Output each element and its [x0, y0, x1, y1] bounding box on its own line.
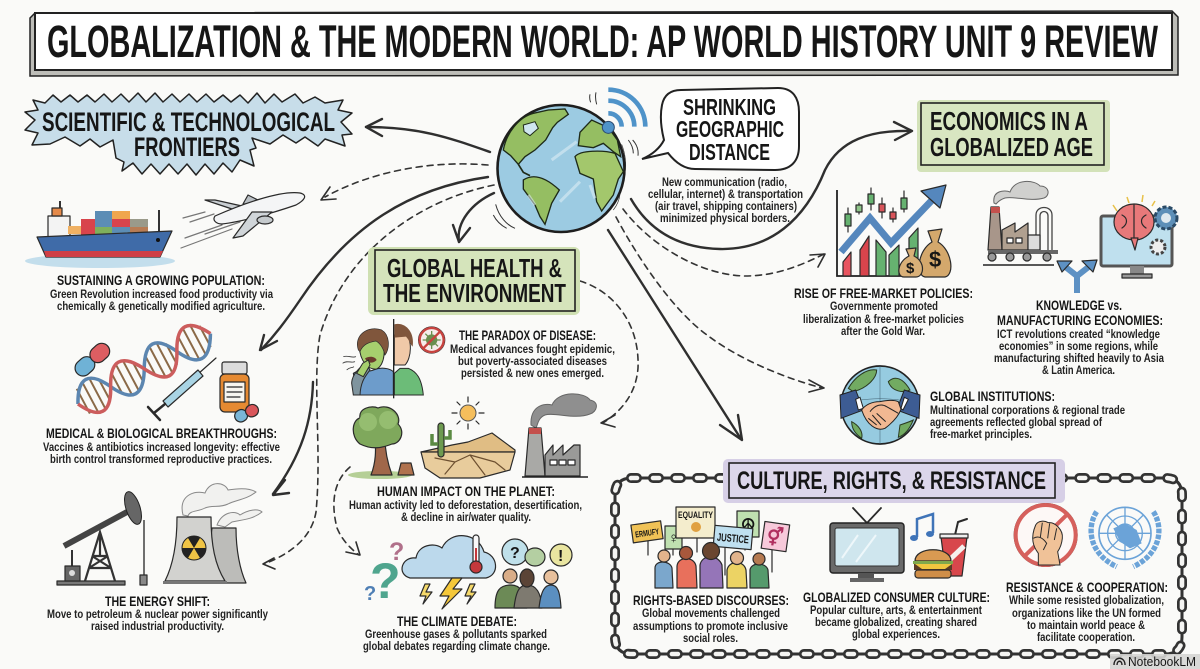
- heading: scientific and technological frontiers: FRONTIERS: [134, 132, 240, 162]
- arrow: globe to scientific frontiers: [366, 119, 490, 152]
- icon: money bags: $: [906, 260, 915, 277]
- icon: sick and healthy people: [343, 319, 445, 398]
- text: the paradox of disease: but poverty-associated diseases: [458, 354, 607, 368]
- speech bubble: shrinking geographic distance: [642, 88, 799, 170]
- icon: protesters with signs: ⚥: [766, 525, 785, 548]
- text: knowledge vs manufacturing economies: ICT revolutions created “knowledge: [997, 327, 1160, 341]
- text: knowledge vs manufacturing economies: KNOWLEDGE vs.: [1036, 297, 1122, 313]
- text: the climate debate: global debates regarding climate change.: [363, 639, 550, 653]
- text: globalized consumer culture: became globalized, creating shared: [815, 615, 977, 629]
- text: rise of free-market policies: after the Gold War.: [841, 324, 925, 338]
- text: shrinking distance description: New communication (radio,: [662, 175, 787, 189]
- chart: market candlesticks and rising arrow: [837, 185, 946, 276]
- text: resistance and cooperation: While some resisted globalization,: [1009, 593, 1164, 607]
- icon: music note: [910, 514, 934, 541]
- icon: computer brain and gears: [1101, 195, 1177, 278]
- icon: blue fork arrow: [1057, 260, 1097, 293]
- text: global institutions: free-market principles.: [930, 427, 1032, 441]
- badge: NotebookLM watermark: NotebookLM: [1128, 654, 1196, 669]
- text: rights-based discourses: Global movements challenged: [642, 606, 780, 620]
- text: shrinking distance description: (air travel, shipping containers): [655, 199, 797, 213]
- icon: question marks: ?: [364, 583, 376, 605]
- text: the energy shift: raised industrial productivity.: [91, 619, 224, 633]
- icon: burger: [913, 550, 953, 578]
- icon: soda cup: [940, 519, 968, 576]
- text: resistance and cooperation: to maintain world peace &: [1027, 618, 1145, 632]
- text: knowledge vs manufacturing economies: economies” in some regions, while: [999, 339, 1158, 353]
- text: global institutions: Multinational corporations & regional trade: [930, 403, 1125, 417]
- text: human impact on the planet: [349, 483, 582, 524]
- text: rights-based discourses: assumptions to promote inclusive: [633, 619, 788, 633]
- heading: culture, rights and resistance: CULTURE, RIGHTS, & RESISTANCE: [737, 467, 1046, 495]
- icon: polluting factory: [522, 394, 596, 477]
- heading: global health and the environment: [368, 247, 580, 315]
- icon: protesters with signs: ☮: [741, 517, 755, 534]
- icon: protesters with signs: ERMUFY: [635, 526, 660, 539]
- icon: desert and sun: [421, 397, 515, 478]
- text: shrinking distance description: [648, 175, 803, 225]
- icon: debating people: ?: [510, 545, 520, 562]
- arrow: globe to culture: [608, 230, 742, 440]
- speech bubble: shrinking geographic distance: SHRINKING: [683, 94, 776, 120]
- heading: global health and the environment: GLOBAL HEALTH &: [387, 253, 562, 283]
- icon: syringe: [148, 358, 216, 420]
- text: resistance and cooperation: [1006, 579, 1168, 644]
- icon: oil pumpjack: [57, 490, 147, 585]
- text: human impact on the planet: & decline in air/water quality.: [401, 510, 531, 524]
- text: medical and biological breakthroughs: Vaccines & antibiotics increased longevity: effective: [43, 440, 280, 454]
- icon: nuclear cooling towers: [163, 484, 262, 584]
- heading: culture, rights and resistance: [723, 459, 1065, 503]
- icon: protesters with signs: EQUALITY: [678, 510, 713, 520]
- icon: debating people: !: [558, 548, 563, 565]
- icon: DNA helix: [70, 318, 219, 420]
- icon: airplane: [181, 193, 305, 248]
- heading: global health and the environment: THE ENVIRONMENT: [383, 278, 566, 308]
- text: medical and biological breakthroughs: birth control transformed reproductive practices.: [50, 452, 272, 466]
- text: rise of free-market policies: RISE OF FREE-MARKET POLICIES:: [794, 285, 973, 301]
- icon: television: [830, 508, 904, 582]
- arrow: globe to global health: [453, 193, 494, 242]
- text: shrinking distance description: cellular, internet) & transportation: [648, 187, 803, 201]
- text: globalized consumer culture: [803, 589, 990, 641]
- text: knowledge vs manufacturing economies: manufacturing shifted heavily to Asia: [994, 351, 1164, 365]
- icon: protesters with signs: JUSTICE: [716, 532, 749, 546]
- text: resistance and cooperation: facilitate cooperation.: [1037, 630, 1135, 644]
- arrow: dashed globe to energy shift: [263, 185, 494, 569]
- text: global institutions: GLOBAL INSTITUTIONS:: [930, 388, 1055, 404]
- heading: scientific and technological frontiers: SCIENTIFIC & TECHNOLOGICAL: [42, 107, 335, 137]
- arrow: global health to planet: [580, 281, 638, 427]
- text: human impact on the planet: HUMAN IMPACT ON THE PLANET:: [377, 483, 555, 499]
- speech bubble: shrinking geographic distance: DISTANCE: [689, 139, 770, 165]
- icon: question marks: ?: [389, 538, 404, 566]
- text: globalized consumer culture: global experiences.: [852, 627, 940, 641]
- text: rights-based discourses: [633, 592, 789, 645]
- text: sustaining a growing population: SUSTAINING A GROWING POPULATION:: [57, 272, 265, 288]
- speech bubble: shrinking geographic distance: GEOGRAPHIC: [676, 116, 784, 142]
- text: the energy shift: THE ENERGY SHIFT:: [105, 593, 210, 609]
- arrow: solid to energy shift: [273, 382, 313, 495]
- icon: money bags: [899, 229, 951, 277]
- heading: economics in a globalized age: ECONOMICS IN A: [930, 106, 1088, 136]
- icon: globe with wifi signal: [493, 90, 645, 232]
- text: sustaining a growing population: Green Revolution increased food productivity via: [50, 287, 273, 301]
- text: knowledge vs manufacturing economies: & Latin America.: [1042, 363, 1115, 377]
- text: the paradox of disease: persisted & new ones emerged.: [461, 366, 604, 380]
- text: human impact on the planet: Human activity led to deforestation, desertification,: [349, 498, 582, 512]
- icon: question marks: ?: [370, 553, 401, 609]
- text: global institutions: agreements reflected global spread of: [930, 415, 1102, 429]
- text: globalized consumer culture: Popular culture, arts, & entertainment: [810, 603, 982, 617]
- arrow: globe to medical breakthroughs: [260, 177, 488, 350]
- text: globalized consumer culture: GLOBALIZED CONSUMER CULTURE:: [803, 589, 990, 605]
- text: sustaining a growing population: [50, 272, 273, 313]
- arrow: dashed to free market: [623, 209, 825, 276]
- text: the climate debate: Greenhouse gases & pollutants sparked: [365, 627, 547, 641]
- text: rise of free-market policies: Governmente promoted: [830, 299, 938, 313]
- text: the paradox of disease: Medical advances fought epidemic,: [450, 342, 615, 356]
- text: rights-based discourses: social roles.: [683, 631, 738, 645]
- heading: scientific and technological frontiers: [25, 93, 352, 175]
- heading: economics in a globalized age: [917, 100, 1110, 172]
- icon: storm cloud and thermometer: [402, 535, 496, 609]
- icon: manufacturing factory: [983, 181, 1058, 265]
- text: the energy shift: Move to petroleum & nuclear power significantly: [47, 607, 268, 621]
- text: resistance and cooperation: organizations like the UN formed: [1012, 606, 1161, 620]
- text: the climate debate: THE CLIMATE DEBATE:: [397, 613, 517, 629]
- icon: United Nations emblem: [1091, 507, 1159, 567]
- icon: protesters with signs: [631, 507, 790, 588]
- heading: economics in a globalized age: GLOBALIZED AGE: [930, 132, 1093, 162]
- icon: capsule pill: [72, 340, 113, 379]
- icon: handshake globe: [840, 366, 920, 444]
- arrow: dashed globe to plane: [321, 164, 488, 200]
- icon: debating people: [495, 539, 572, 608]
- arrow: human impact to climate: [334, 467, 360, 555]
- icon: container ship: [25, 201, 175, 268]
- text: knowledge vs manufacturing economies: [994, 297, 1164, 377]
- text: sustaining a growing population: chemically & genetically modified agriculture.: [57, 299, 265, 313]
- text: rights-based discourses: RIGHTS-BASED DISCOURSES:: [633, 592, 789, 608]
- text: medical and biological breakthroughs: MEDICAL & BIOLOGICAL BREAKTHROUGHS:: [46, 425, 277, 441]
- text: the energy shift: [47, 593, 268, 633]
- icon: protesters with signs: ♀: [668, 530, 679, 547]
- text: the paradox of disease: THE PARADOX OF DISEASE:: [459, 327, 596, 343]
- icon: question marks: [364, 538, 404, 609]
- text: shrinking distance description: minimized physical borders.: [660, 211, 790, 225]
- text: the paradox of disease: [450, 327, 615, 380]
- text: the climate debate: [363, 613, 550, 653]
- arrow: dashed to global institutions: [616, 217, 824, 392]
- icon: medicine bottle: [220, 362, 260, 424]
- text: medical and biological breakthroughs: [43, 425, 280, 466]
- icon: money bags: $: [929, 247, 941, 272]
- panel: chain border: [615, 478, 1182, 654]
- icon: tree and stump: [348, 407, 414, 479]
- text: global institutions: [930, 388, 1125, 441]
- arrow: globe to economics: [631, 122, 912, 249]
- icon: no globalization fist: [1014, 503, 1077, 567]
- text: rise of free-market policies: [794, 285, 973, 338]
- text: rise of free-market policies: liberalization & free-market policies: [803, 312, 964, 326]
